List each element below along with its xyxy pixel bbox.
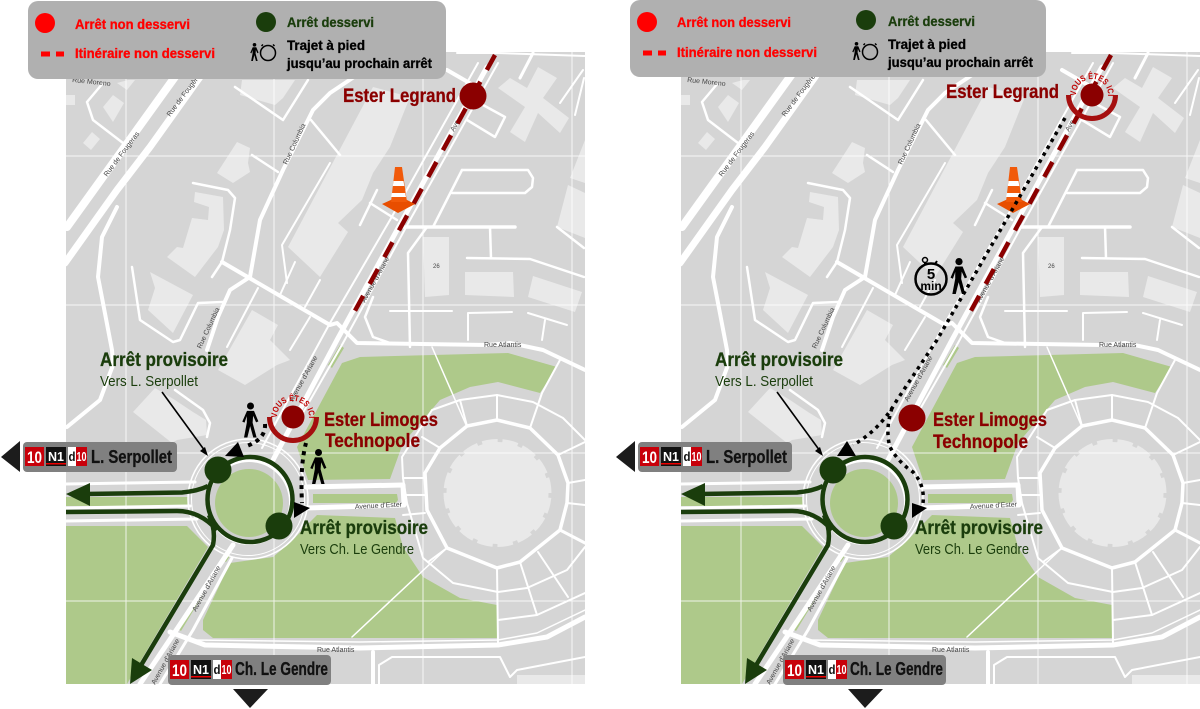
- street names: Avenue d'Ariane: [976, 256, 1007, 304]
- arrowhead: south exit: [745, 658, 767, 684]
- icon: stopwatch 5 min: [916, 258, 946, 294]
- label: temporary stop to Le Gendre: Vers Ch. Le Gendre: [915, 541, 1029, 558]
- label: Ester Limoges Technopole: Ester Limoges: [324, 410, 438, 431]
- walking path to south-east stop: [888, 408, 923, 503]
- temporary stop: Le Gendre: [880, 512, 908, 540]
- walking path to south-east stop: [302, 443, 306, 503]
- street names: Rue Columbia: [282, 123, 308, 166]
- panel: right map: [616, 52, 1200, 708]
- legend: right: jusqu’au prochain arrêt: [887, 54, 1033, 70]
- panel: left map: [1, 52, 585, 708]
- legend: right: Arrêt non desservi: [677, 14, 791, 30]
- direction sign: L. Serpollet: N1: [663, 449, 679, 464]
- street names: 26: [433, 264, 440, 270]
- direction sign: Ch. Le Gendre: [783, 655, 946, 708]
- direction sign: Ch. Le Gendre: 10: [222, 662, 232, 677]
- arrowhead: west stop walk: [225, 442, 244, 457]
- legend: right: Itinéraire non desservi: [677, 44, 817, 60]
- street names: Rue Atlantis: [484, 342, 522, 349]
- bus route: roundabout and exits: [66, 457, 292, 667]
- temporary stop: Serpollet: [820, 456, 846, 484]
- label: temporary stop to Serpollet: Arrêt provisoire: [100, 350, 228, 371]
- label: Ester Limoges Technopole: [324, 410, 438, 452]
- pointer arrow to stop: [162, 392, 208, 456]
- street names: Rue Columbia: [196, 307, 222, 350]
- label: temporary stop to Serpollet: [715, 350, 843, 390]
- arrowhead: west stop walk: [837, 441, 856, 456]
- street names: Rue de Fougeras: [718, 130, 756, 178]
- label: temporary stop to Serpollet: [100, 350, 228, 390]
- stop: Ester Legrand: [343, 82, 486, 110]
- direction sign: Ch. Le Gendre: N1: [808, 662, 824, 677]
- label: Ester Limoges Technopole: [933, 410, 1047, 453]
- legend: left: Trajet à pied: [287, 37, 365, 53]
- temporary stop: Le Gendre: [266, 512, 292, 540]
- label: Ester Limoges Technopole: Technopole: [325, 431, 420, 452]
- icon: pedestrian east: [310, 449, 326, 484]
- legend: right: [630, 0, 1046, 77]
- label: temporary stop to Serpollet: Vers L. Serpollet: [715, 373, 814, 390]
- street names: Avenue d'Ariane: [766, 638, 797, 686]
- label: temporary stop to Le Gendre: Vers Ch. Le Gendre: [300, 541, 414, 558]
- closed route: red dashed line: [351, 55, 495, 318]
- street names: 26: [1048, 264, 1055, 270]
- legend: left: [28, 1, 446, 79]
- label: temporary stop to Le Gendre: Arrêt provisoire: [915, 518, 1043, 539]
- street names: Ave: [450, 119, 461, 133]
- direction sign: Ch. Le Gendre: N1: [193, 662, 209, 677]
- street map base: [65, 52, 585, 684]
- direction sign: Ch. Le Gendre: Ch. Le Gendre: [850, 659, 943, 679]
- you are here marker: Ester Limoges: VOUS ÊTES ICI: [271, 393, 315, 418]
- direction sign: L. Serpollet: 10: [642, 448, 657, 467]
- legend: right: Trajet à pied: [888, 36, 966, 52]
- direction sign: L. Serpollet: [616, 441, 792, 472]
- street names: Avenue d'Ariane: [289, 355, 320, 403]
- street names: Avenue d'Ariane: [151, 638, 182, 686]
- pointer arrow to stop: [777, 392, 823, 456]
- street names: [72, 70, 522, 686]
- label: temporary stop to Le Gendre: Arrêt provisoire: [300, 518, 428, 539]
- legend: right: Arrêt desservi: [888, 13, 975, 29]
- bus route: roundabout and exits: [681, 457, 908, 667]
- direction sign: L. Serpollet: 10: [76, 449, 86, 464]
- street names: Avenue d'Ariane: [904, 355, 935, 403]
- street names: Rue Moreno: [72, 77, 111, 88]
- temporary stop: Serpollet: [204, 456, 232, 484]
- direction sign: L. Serpollet: [1, 441, 177, 472]
- icon: stopwatch 5 min: min: [920, 279, 942, 293]
- street names: Rue Atlantis: [1099, 342, 1137, 349]
- icon: stopwatch 5 min: 5: [927, 266, 935, 283]
- you are here marker: Ester Legrand: [1066, 71, 1118, 121]
- icon: pedestrian: [951, 258, 967, 294]
- you are here marker: Ester Legrand: VOUS ÊTES ICI: [1070, 71, 1114, 96]
- street names: Rue de Fougeras: [103, 130, 141, 178]
- street names: Rue Atlantis: [317, 647, 355, 654]
- street names: Avenue d'Ariane: [192, 565, 223, 613]
- label: temporary stop to Serpollet: Arrêt provisoire: [715, 350, 843, 371]
- street names: Ave: [1065, 119, 1076, 133]
- walking path to west stop: [853, 118, 1065, 445]
- label: Ester Limoges Technopole: Ester Limoges: [933, 410, 1047, 431]
- arrowhead: south-east stop walk: [912, 503, 927, 518]
- street map base: [680, 52, 1200, 684]
- direction sign: L. Serpollet: L. Serpollet: [706, 447, 787, 467]
- street names: [687, 70, 1137, 686]
- direction sign: Ch. Le Gendre: 10: [172, 661, 187, 680]
- direction sign: L. Serpollet: d: [68, 449, 76, 464]
- direction sign: L. Serpollet: L. Serpollet: [91, 447, 172, 467]
- label: Ester Limoges Technopole: Technopole: [933, 432, 1028, 453]
- direction sign: Ch. Le Gendre: [168, 655, 331, 708]
- you are here marker: Ester Limoges: [267, 393, 319, 443]
- label: Ester Legrand: Ester Legrand: [946, 82, 1059, 103]
- arrowhead: west exit: [681, 483, 705, 506]
- street names: Rue Moreno: [687, 77, 726, 88]
- walking path to west stop: [244, 424, 265, 447]
- icon: pedestrian north-west: [242, 402, 258, 438]
- label: temporary stop to Serpollet: Vers L. Serpollet: [100, 373, 199, 390]
- street names: Rue Atlantis: [932, 647, 970, 654]
- label: temporary stop to Le Gendre: [300, 518, 428, 558]
- direction sign: L. Serpollet: N1: [48, 449, 64, 464]
- street names: Rue Columbia: [897, 123, 923, 166]
- label: temporary stop to Le Gendre: [915, 518, 1043, 558]
- closed route: red dashed line: [967, 55, 1111, 318]
- direction sign: Ch. Le Gendre: 10: [836, 662, 846, 677]
- legend: left: Arrêt non desservi: [75, 16, 190, 32]
- street names: Rue Columbia: [811, 307, 837, 350]
- icon: traffic cone: [997, 167, 1030, 213]
- direction sign: L. Serpollet: 10: [692, 449, 702, 464]
- arrowhead: west exit: [66, 483, 90, 506]
- direction sign: Ch. Le Gendre: 10: [787, 661, 802, 680]
- direction sign: L. Serpollet: d: [684, 449, 691, 464]
- arrowhead: south-east stop walk: [294, 502, 310, 518]
- stop: Ester Legrand: Ester Legrand: [343, 86, 456, 107]
- street names: Rue de Fougères: [781, 70, 819, 118]
- direction sign: L. Serpollet: 10: [27, 448, 42, 467]
- legend: left: jusqu’au prochain arrêt: [286, 55, 432, 71]
- street names: Rue de Fougères: [166, 70, 204, 118]
- street names: Avenue d'Ariane: [807, 565, 838, 613]
- arrowhead: south exit: [130, 658, 152, 684]
- stop: Ester Limoges: [898, 404, 926, 432]
- street names: Avenue d'Ariane: [361, 256, 392, 304]
- icon: traffic cone: [382, 167, 415, 213]
- direction sign: Ch. Le Gendre: d: [214, 662, 221, 677]
- street names: Avenue d'Ester: [970, 502, 1018, 511]
- direction sign: Ch. Le Gendre: d: [828, 662, 836, 677]
- direction sign: Ch. Le Gendre: Ch. Le Gendre: [235, 659, 328, 679]
- legend: left: Itinéraire non desservi: [75, 45, 215, 61]
- street names: Avenue d'Ester: [355, 502, 403, 511]
- legend: left: Arrêt desservi: [287, 14, 374, 30]
